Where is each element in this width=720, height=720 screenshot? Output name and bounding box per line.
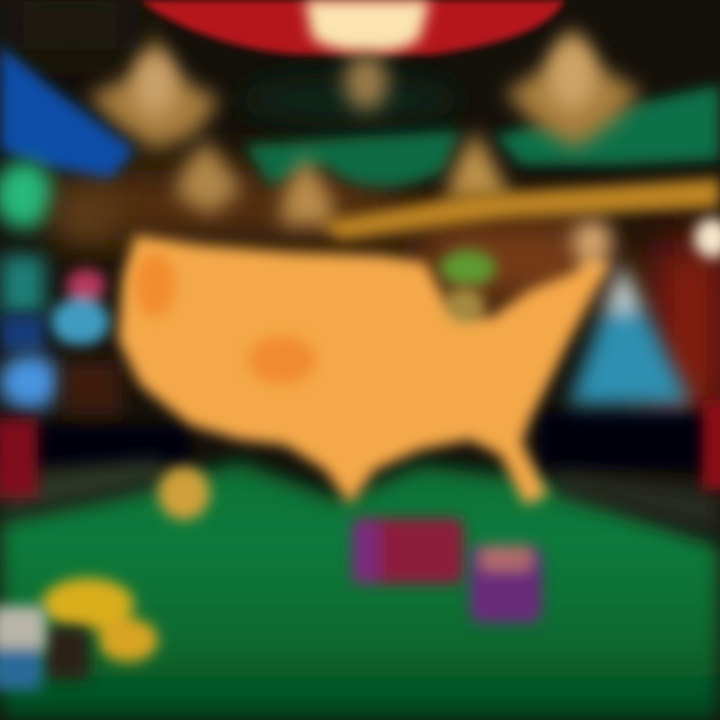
light: white right — [694, 218, 720, 258]
map: orange spot centre — [248, 336, 316, 384]
panel: blue wall left — [0, 45, 135, 180]
panel: grey table edge right — [550, 470, 720, 535]
chandelier glow: upper left — [133, 53, 177, 117]
panel: grey table edge left — [0, 460, 170, 515]
chandelier: gold centre lower — [280, 155, 335, 225]
banner: green centre — [245, 130, 460, 186]
panel: green poker table — [0, 462, 720, 720]
panel: left wall amber patch — [55, 190, 115, 240]
icon: teal glow left — [0, 161, 54, 229]
chips: purple stack — [470, 545, 542, 623]
panel: dark table rail right — [540, 412, 720, 470]
panel: dark table rail left — [0, 425, 190, 467]
icon: dark blue patch left — [0, 315, 45, 350]
light: central white lamp — [305, 0, 430, 53]
chandelier: gold upper right — [505, 25, 642, 148]
background: warm wall glow — [0, 0, 720, 420]
chip: gold left of map — [158, 466, 210, 520]
panel: red block left — [0, 418, 38, 498]
panel: red wall right — [702, 400, 720, 490]
banner: green right — [495, 85, 720, 165]
panel: teal blocks left — [0, 255, 45, 315]
map: orange spot northwest — [135, 253, 175, 317]
chips: yellow pile left — [42, 578, 158, 662]
map: United States — [118, 235, 610, 505]
chandelier glow: upper right — [548, 40, 596, 110]
map: green spot northeast — [440, 250, 496, 286]
chandelier: small top centre — [344, 54, 388, 110]
icon: blue glow left — [0, 354, 62, 410]
bar: gold beam — [320, 178, 720, 240]
chandelier: gold upper left — [88, 35, 220, 150]
chandelier: gold left lower — [175, 140, 242, 215]
pyramid: blue triangle right — [568, 262, 692, 405]
icon: pink and blue lights — [50, 269, 110, 346]
chips: maroon stack — [352, 518, 464, 584]
panel: brown strip left — [62, 360, 122, 415]
chips: white and blue stack — [0, 606, 46, 690]
chandelier: gold right lower — [445, 130, 510, 200]
chips: dark stack left — [44, 626, 90, 680]
panel: dark green under canopy — [240, 72, 460, 128]
canopy: red arc — [140, 0, 565, 55]
map: pale northeast tip — [572, 220, 612, 264]
map: olive spot below green — [445, 287, 485, 323]
